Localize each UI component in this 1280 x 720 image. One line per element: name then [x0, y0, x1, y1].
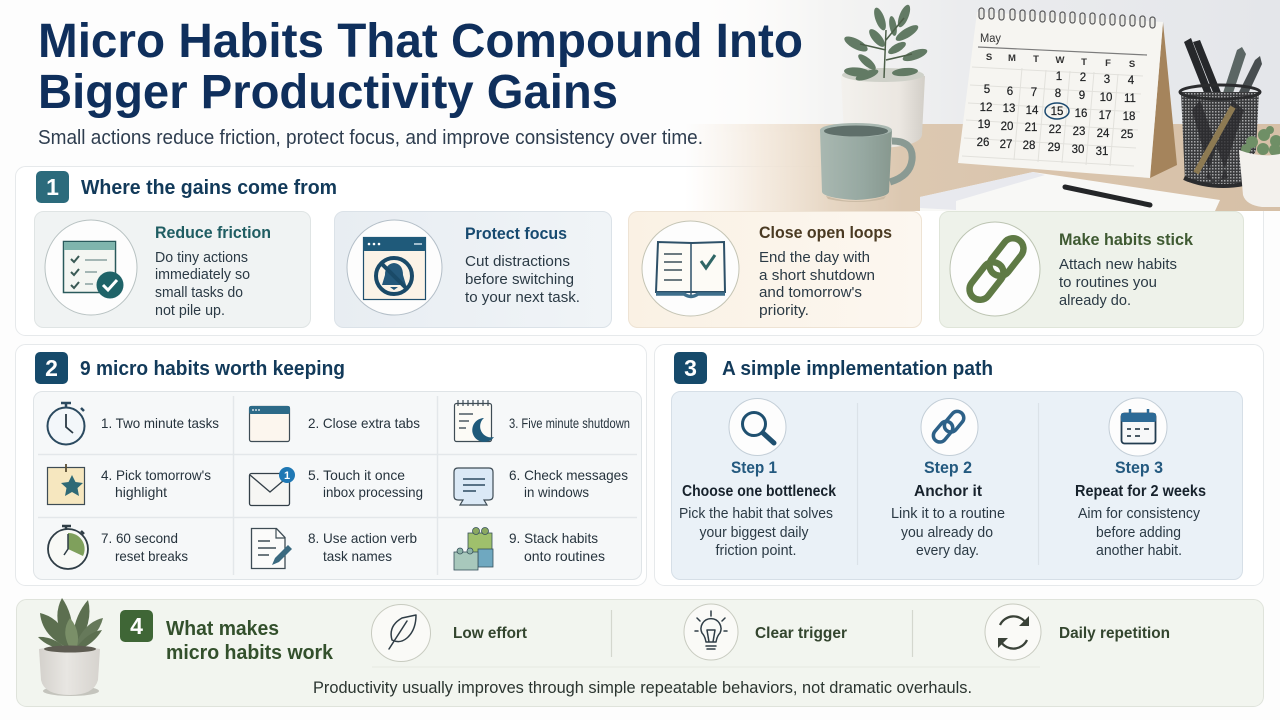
habit 8: 8. Use action verb [308, 530, 417, 546]
habit 8 [252, 528, 417, 568]
desk calendar: S [1129, 59, 1135, 70]
section 1 badge: 1 [46, 174, 59, 200]
text: protect focus [465, 254, 580, 306]
desk calendar: 22 [1049, 124, 1061, 136]
takeaway text: Productivity usually improves through simple repeatable behaviors, not dramatic overhauls. [313, 679, 972, 697]
desk calendar: 25 [1121, 129, 1133, 141]
habit 5: 5. Touch it once [308, 467, 405, 483]
habit 7: reset breaks [115, 548, 188, 564]
panel: section 4 what makes micro habits work [16, 598, 1264, 706]
section 4 badge [120, 610, 153, 642]
desk calendar: 15 [1051, 106, 1063, 118]
step 2: Anchor it [914, 483, 982, 500]
clear trigger [684, 604, 847, 660]
icon: checklist [64, 242, 124, 298]
plant in pot [841, 3, 929, 148]
desk calendar: 8 [1055, 88, 1061, 100]
desk calendar: T [1033, 54, 1039, 65]
section 2 badge [35, 352, 68, 384]
desk calendar: 3 [1104, 74, 1110, 86]
habit 5 [250, 467, 423, 506]
habit 7: 7. 60 second [101, 530, 178, 546]
card: make habits stick [940, 212, 1244, 328]
habits grid [34, 392, 642, 580]
section 4 badge: 4 [130, 613, 143, 639]
desk calendar: 18 [1123, 111, 1135, 123]
step 3 [1075, 398, 1206, 559]
card: reduce friction [34, 212, 310, 328]
habit 3 [454, 400, 630, 442]
desk calendar: 21 [1025, 122, 1037, 134]
desk calendar: 27 [1000, 139, 1012, 151]
desk calendar: 14 [1026, 105, 1039, 117]
step 3: another habit. [1096, 543, 1182, 559]
habit 2 [249, 406, 420, 442]
desk calendar: W [1056, 55, 1065, 66]
text: reduce friction: not pile up. [155, 303, 225, 319]
text: close open loops [759, 250, 875, 319]
clear trigger: Clear trigger [755, 625, 847, 642]
section 4 heading: micro habits work [166, 642, 334, 664]
desk calendar: May [980, 33, 1001, 45]
habit 6: in windows [524, 484, 589, 500]
section 1 badge [36, 171, 69, 203]
section 3 badge: 3 [684, 355, 697, 381]
step 3: Step 3 [1115, 458, 1163, 477]
desk calendar: 19 [978, 119, 990, 131]
desk calendar: 28 [1023, 140, 1035, 152]
desk calendar: 26 [977, 137, 989, 149]
desk calendar: 16 [1075, 108, 1087, 120]
section 4 heading [166, 618, 334, 664]
step 1: your biggest daily [700, 525, 809, 541]
steps panel [672, 392, 1242, 580]
habit 4 [48, 464, 211, 504]
desk calendar: M [1008, 53, 1016, 64]
icon: open book with check [656, 242, 725, 296]
desk calendar: 30 [1072, 144, 1084, 156]
panel: section 2 nine micro habits [16, 344, 646, 586]
desk calendar: 24 [1097, 128, 1110, 140]
low effort: Low effort [453, 625, 528, 642]
subtitle: Small actions reduce friction, protect focus, and improve consistency over time. [38, 127, 703, 149]
habit 6 [454, 467, 628, 505]
text: close open loops: End the day with [759, 250, 870, 266]
step 2: Link it to a routine [891, 506, 1005, 522]
notebook and pen [920, 172, 1220, 211]
card: close open loops [628, 212, 922, 328]
habit 7 [48, 526, 188, 569]
text: close open loops: a short shutdown [759, 268, 875, 284]
step 3: Repeat for 2 weeks [1075, 483, 1206, 500]
desk calendar: S [986, 52, 992, 63]
icon: chain link [965, 234, 1028, 304]
text: close open loops: and tomorrow's [759, 285, 862, 301]
section 1 heading: Where the gains come from [81, 177, 337, 199]
habit 4: highlight [115, 484, 167, 500]
habit 9: onto routines [524, 548, 605, 564]
hero desk photo illustration [640, 0, 1280, 211]
text: reduce friction [155, 250, 250, 319]
desk calendar: 17 [1099, 110, 1111, 122]
heading: reduce friction: Reduce friction [155, 223, 271, 242]
habit 5: inbox processing [323, 484, 423, 500]
small succulent [1239, 126, 1280, 207]
habit 9 [454, 528, 605, 570]
text: protect focus: Cut distractions [465, 254, 570, 270]
step 2: Step 2 [924, 458, 972, 477]
desk calendar: 11 [1124, 93, 1136, 105]
step 3: before adding [1096, 525, 1181, 541]
section 3 badge [674, 352, 707, 384]
icon: potted plant [38, 598, 103, 696]
habit 6: 6. Check messages [509, 467, 628, 483]
desk calendar: 12 [980, 102, 992, 114]
panel: section 3 implementation path [654, 344, 1264, 586]
habit 1: 1. Two minute tasks [101, 415, 219, 431]
text: reduce friction: immediately so [155, 267, 250, 283]
coffee mug [820, 123, 912, 202]
desk calendar: F [1105, 58, 1111, 69]
desk calendar: 10 [1100, 92, 1112, 104]
habit 5: 1 [284, 470, 290, 482]
desk calendar: 2 [1080, 72, 1086, 84]
desk calendar: 29 [1048, 142, 1060, 154]
habit 1 [48, 403, 219, 444]
habit 3: 3. Five minute shutdown [509, 415, 630, 431]
low effort [372, 604, 528, 662]
title: Bigger Productivity Gains [38, 66, 618, 119]
step 2: you already do [901, 525, 993, 541]
desk calendar [958, 8, 1177, 178]
section 3 heading: A simple implementation path [722, 358, 993, 380]
text: make habits stick: to routines you [1059, 275, 1157, 291]
step 1 [679, 398, 836, 559]
step 1: Pick the habit that solves [679, 506, 833, 522]
habit 2: 2. Close extra tabs [308, 415, 420, 431]
step 1: Step 1 [731, 458, 777, 477]
section 2 heading: 9 micro habits worth keeping [80, 358, 345, 380]
title: Micro Habits That Compound Into [38, 15, 803, 68]
text: make habits stick: Attach new habits [1059, 257, 1177, 273]
habit 9: 9. Stack habits [509, 530, 598, 546]
text: protect focus: before switching [465, 272, 574, 288]
desk calendar: 5 [984, 84, 990, 96]
step 1: Choose one bottleneck [682, 483, 836, 500]
desk calendar: 1 [1056, 71, 1062, 83]
daily repetition: Daily repetition [1059, 625, 1170, 642]
desk calendar: 31 [1096, 146, 1108, 158]
step 3: Aim for consistency [1078, 506, 1201, 522]
desk calendar: 4 [1128, 75, 1135, 87]
section 2 badge: 2 [45, 355, 58, 381]
icon: window with muted bell [363, 237, 426, 300]
desk calendar: 20 [1001, 121, 1013, 133]
step 2 [891, 398, 1005, 559]
pen holder [1180, 38, 1262, 186]
desk calendar: 9 [1079, 90, 1085, 102]
daily repetition [985, 604, 1170, 660]
desk calendar: 23 [1073, 126, 1085, 138]
section 4 heading: What makes [166, 618, 279, 640]
step 1: friction point. [716, 543, 796, 559]
desk calendar: 6 [1007, 86, 1013, 98]
text: make habits stick [1059, 257, 1177, 309]
desk calendar: 7 [1031, 87, 1037, 99]
heading: protect focus: Protect focus [465, 224, 567, 243]
panel: section 1 where the gains come from [16, 0, 1280, 336]
text: close open loops: priority. [759, 303, 809, 319]
step 2: every day. [916, 543, 979, 559]
habit 8: task names [323, 548, 392, 564]
text: reduce friction: Do tiny actions [155, 250, 248, 266]
card: protect focus [334, 212, 612, 328]
text: make habits stick: already do. [1059, 293, 1131, 309]
text: reduce friction: small tasks do [155, 285, 243, 301]
heading: close open loops: Close open loops [759, 223, 892, 242]
desk calendar: T [1081, 57, 1087, 68]
title [38, 15, 803, 119]
habit 4: 4. Pick tomorrow's [101, 467, 211, 483]
heading: make habits stick: Make habits stick [1059, 230, 1194, 249]
text: protect focus: to your next task. [465, 290, 580, 306]
desk calendar: 13 [1003, 103, 1015, 115]
